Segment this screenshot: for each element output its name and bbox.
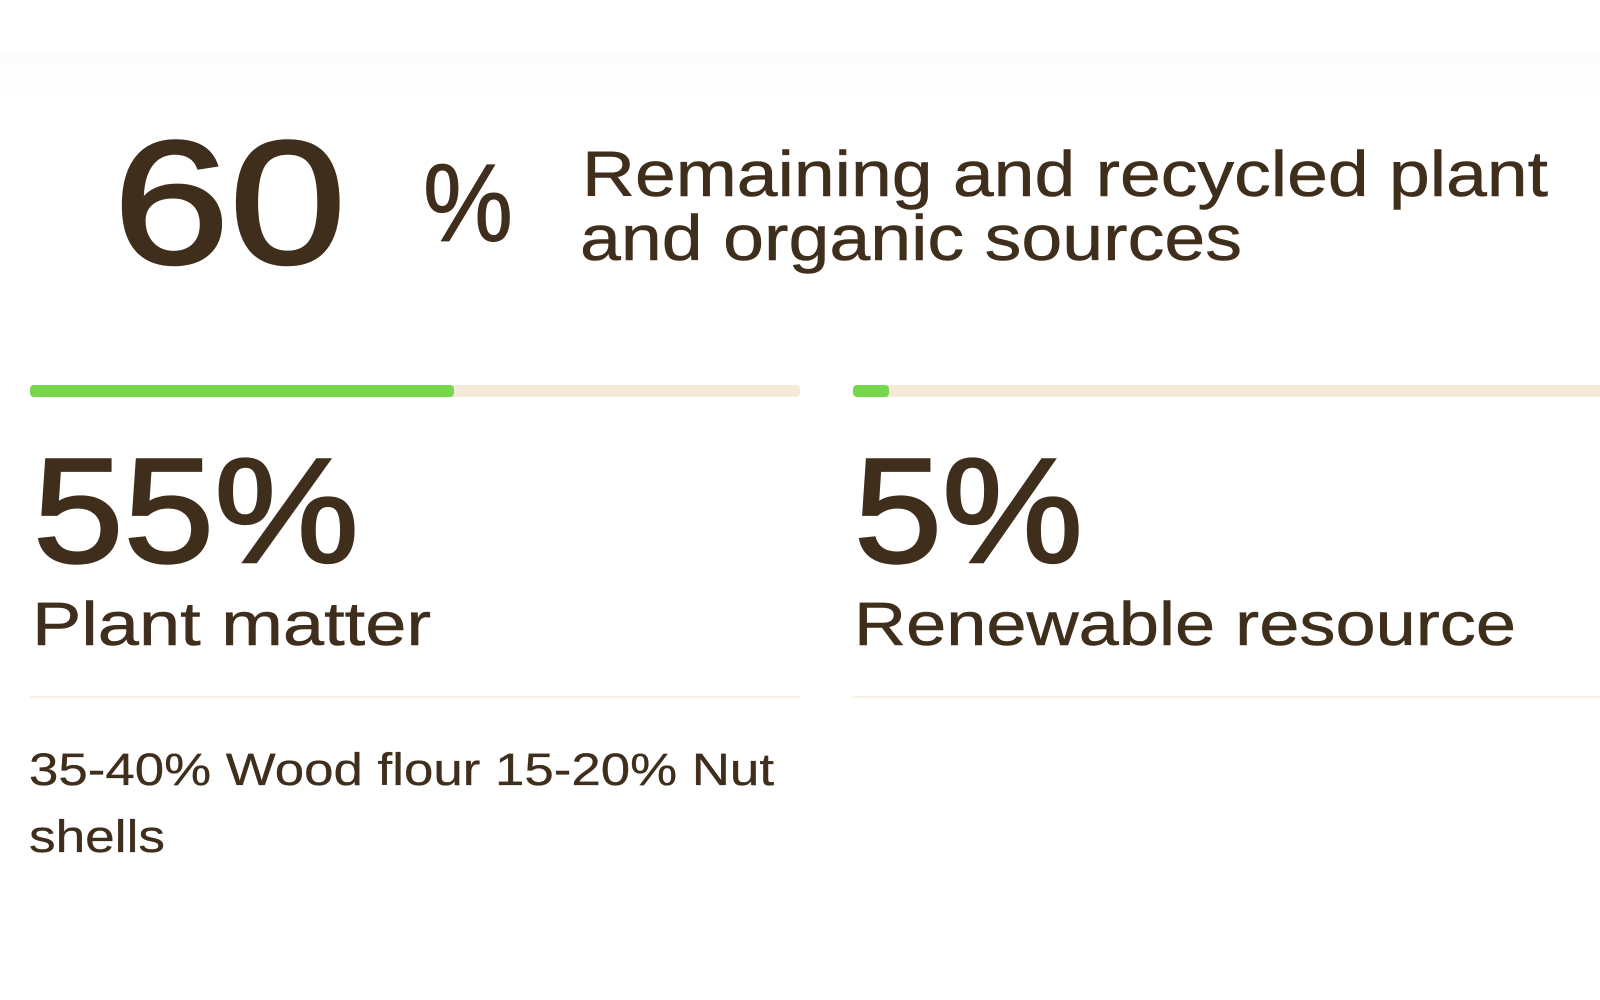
panel: renewable resource (853, 385, 1600, 698)
panel: plant matter (29, 385, 800, 862)
progress bar: 5% (853, 385, 1600, 397)
percent sign: % (423, 142, 513, 265)
progress bar: 55% (30, 385, 800, 397)
stat: 5%: 5% (854, 427, 1083, 594)
headline: 60 percent summary (113, 106, 1548, 301)
detail text (29, 744, 775, 862)
big number 60: 60 (113, 106, 346, 301)
headline description: Remaining and recycled plant (582, 138, 1548, 210)
label: renewable resource: Renewable resource (854, 590, 1516, 658)
headline description (580, 138, 1548, 274)
detail text: 35-40% Wood flour 15-20% Nut (29, 744, 775, 795)
stat: 55%: 55% (33, 427, 359, 594)
detail text: shells (29, 811, 165, 862)
label: plant matter: Plant matter (32, 590, 431, 658)
headline description: and organic sources (580, 202, 1242, 274)
